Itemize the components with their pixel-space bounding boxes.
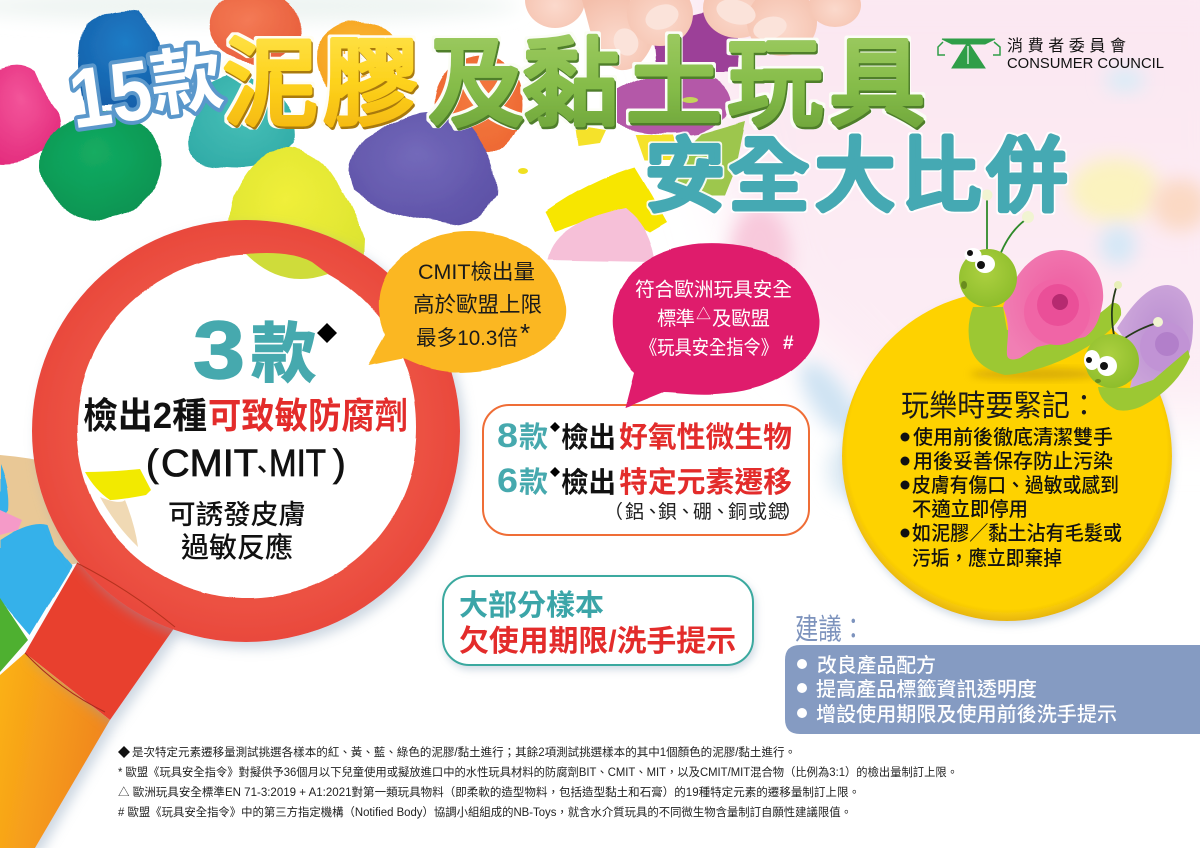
title: rest green: 具 [829,6,925,145]
speech bubble: pink [613,244,819,408]
line: most samples: 大部分樣本 [459,589,604,622]
clay: magenta purple [605,72,731,134]
reminder list: 污垢，應立即棄掉 [912,546,1062,570]
bubble text: 《玩具安全指令》 [640,337,778,359]
panel: reminder circle [842,291,1172,621]
loose clay pieces [518,122,745,262]
footnotes [118,745,958,819]
note: asterisk: * 歐盟《玩具安全指令》對擬供予36個月以下兒童使用或擬放進口中的水性玩具材料的防腐劑BIT、CMIT、MIT，以及CMIT/MIT混合物（比例為3:1）的檢出量制訂上限。 [118,765,958,779]
line: 8 samples: 檢出 [561,422,616,453]
preservatives: ( [146,443,159,485]
pink shell [1003,250,1103,359]
lens text [83,301,408,563]
line: 6 samples: 檢出 [561,467,616,498]
bubble text: 符合歐洲玩具安全 [635,279,792,301]
clay: green strip [0,598,28,672]
preservatives: ) [333,443,346,485]
left tray of clay [0,455,150,672]
title [62,6,1067,228]
recommendation list: 增設使用期限及使用前後洗手提示 [816,703,1117,726]
line: 8 samples: 8 [497,417,518,455]
reminder list: 如泥膠／黏土沾有毛髮或 [912,522,1122,545]
bubble text: # [783,333,794,354]
panel: missing labels [443,576,753,665]
clay: orange [436,55,524,155]
count: 3 款: 款 [251,301,316,395]
effect line 1: 可誘發皮膚 [168,500,306,530]
reminder list: 不適立即停用 [912,498,1028,521]
handle: red [25,563,175,720]
fingers [525,0,861,70]
line: 6 samples: 款 [519,459,548,501]
bubble text: 標準 [657,308,695,330]
clay: sky blue [0,465,8,520]
preservatives [146,443,346,485]
title: safety comparison: 比 [901,112,981,228]
reminder heading: 玩樂時要緊記： [901,390,1098,423]
count: 3 款 [193,301,316,396]
bubble text: 最多10.3倍 [416,327,518,350]
title: safety comparison: 併 [987,112,1067,228]
note: diamond: 是次特定元素遷移量測試挑選各樣本的紅、黃、藍、綠色的泥膠/黏土進行；其餘2項測試挑選樣本的其中1個顏色的泥膠/黏土進行。 [132,745,796,759]
antennae [987,198,1028,255]
count: 15 款 [62,18,229,146]
line: 8 samples: 好氧性微生物 [619,421,792,454]
title: clay yellow [222,6,419,145]
line: 6 samples: 特定元素遷移 [619,466,792,499]
elements list: （鋁、鋇、硼、銅或鍶） [604,497,802,524]
bubble text [635,279,794,359]
bubble text: 及歐盟 [712,308,770,330]
snail body [969,303,1121,375]
recommendation list: 改良產品配方 [817,654,936,677]
snail body [1098,350,1190,411]
title: safety comparison: 大 [815,112,895,228]
antennae [1112,285,1157,338]
bubble text: 高於歐盟上限 [413,293,542,317]
count: 15 款: 款 [143,18,229,132]
preservatives: CMIT [161,443,258,485]
bubble text: * [520,318,530,348]
title: rest green: 及 [428,6,524,145]
clay: purple [351,110,497,225]
title: safety comparison [645,112,1067,228]
clay: teal [191,75,296,168]
line: missing hints: 欠使用期限/洗手提示 [459,625,736,658]
preservatives: MIT [269,443,326,485]
reminder list: 皮膚有傷口、過敏或感到 [912,474,1119,497]
title: clay yellow: 泥 [222,6,318,145]
logo chinese name: 消費者委員會 [1007,37,1126,55]
title: rest green [428,6,925,145]
hand pressing clay [525,0,861,134]
clay: pink [0,66,60,164]
icon: small snail [1084,281,1193,411]
count: 15 款: 15 [63,42,158,146]
handle: orange [0,653,110,848]
panel: recommendations [785,645,1200,734]
lens [77,255,417,598]
line: 8 samples [497,414,792,456]
line: 6 samples [497,459,792,501]
magnifying glass [0,220,460,848]
clay: dark blue [78,10,171,105]
reminder list: 用後妥善保存防止污染 [913,450,1113,473]
line: 8 samples: 款 [519,414,548,456]
icon: big snail [959,190,1121,380]
panel: test results [483,405,809,535]
clay: lime [226,149,364,290]
title: rest green: 黏 [523,6,619,145]
recommendations heading: 建議： [795,613,865,646]
diamond mark [317,323,337,343]
title: rest green: 玩 [727,6,823,145]
clay balls [0,0,524,290]
title: safety comparison: 全 [729,112,809,228]
logo: consumer council [938,37,1164,72]
title: clay yellow: 膠 [323,6,419,145]
line: 6 samples: 6 [497,462,518,500]
bubble text [413,261,542,350]
bubble text: △ [696,306,711,323]
recommendation list [797,654,1117,726]
ring [32,220,460,642]
clay: amber [316,20,400,100]
head [959,249,1017,307]
logo icon [938,39,1000,68]
clay: green [41,110,161,220]
heading red: 可致敏防腐劑 [208,395,408,436]
head [1085,334,1139,388]
reminder list [900,426,1122,570]
purple shell [1117,285,1193,391]
clay: coral [210,0,300,63]
title: rest green: 土 [626,6,722,145]
preservatives: 、 [250,457,274,484]
recommendation list: 提高產品標籤資訊透明度 [816,678,1037,701]
bubble text: CMIT檢出量 [418,261,535,284]
speech bubble: yellow [368,232,566,372]
note: hash: # 歐盟《玩具安全指令》中的第三方指定機構（Notified Body）協調小組組成的NB-Toys，就含水介質玩具的不同微生物含量制訂自願性建議限值。 [118,805,852,819]
count: 3 款: 3 [193,305,245,396]
note: triangle: △ 歐洲玩具安全標準EN 71-3:2019 + A1:2021對第一類玩具物料（即柔軟的造型物料，包括造型黏土和石膏）的19種特定元素的遷移量制訂上限。 [118,785,860,799]
logo english name: CONSUMER COUNCIL [1007,56,1164,72]
heading black: 檢出2種 [83,395,207,436]
reminder list: 使用前後徹底清潔雙手 [913,426,1113,449]
title: safety comparison: 安 [645,112,725,228]
effect line 2: 過敏反應 [181,532,293,563]
